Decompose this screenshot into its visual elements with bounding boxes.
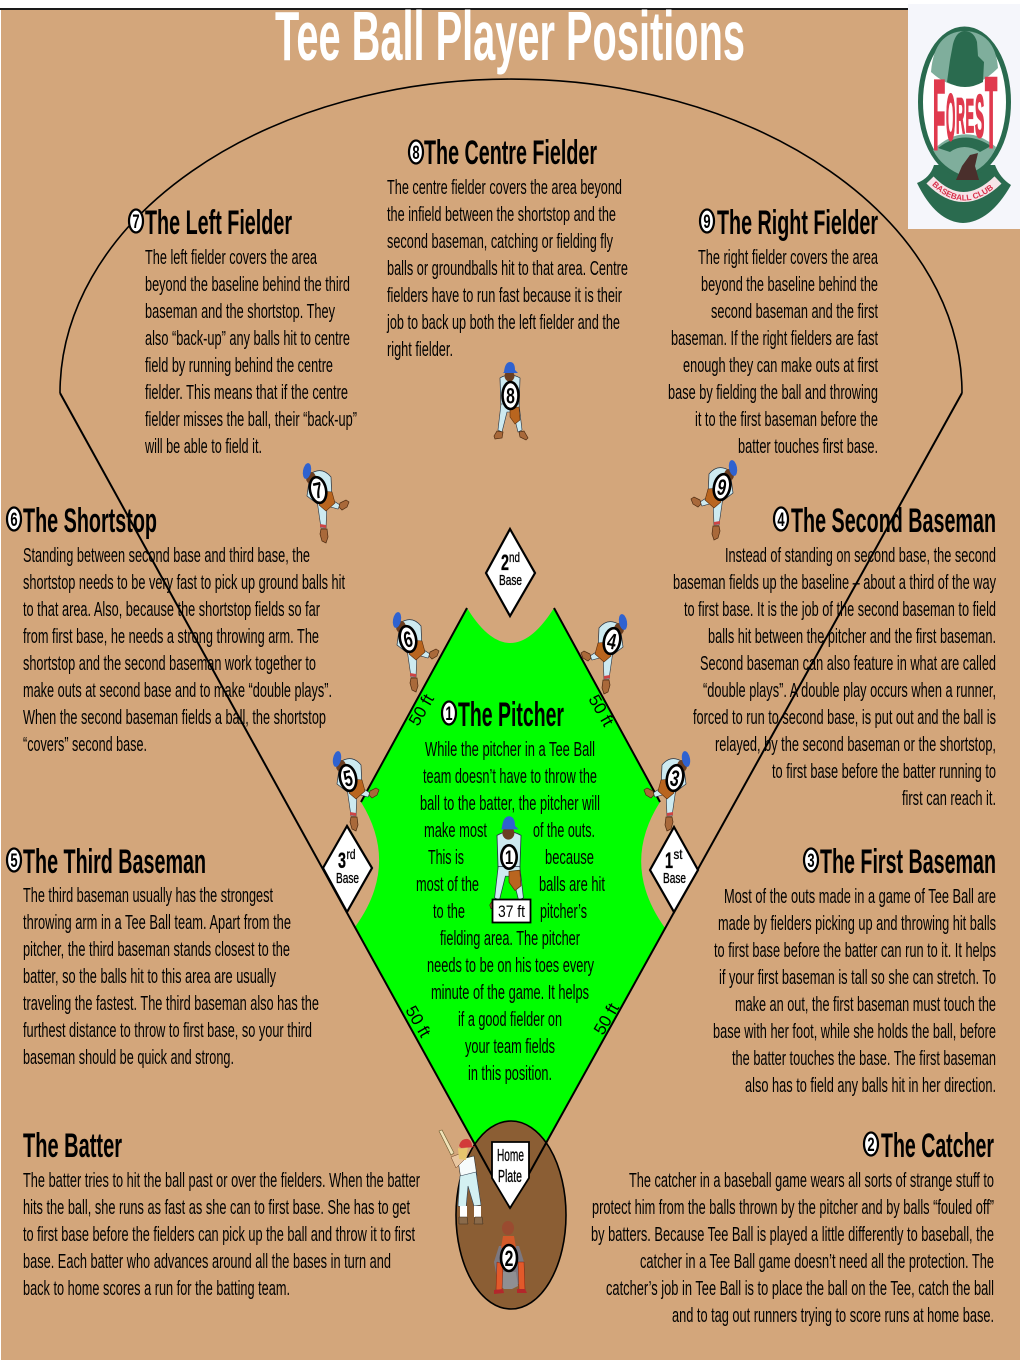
- second base: nd: [509, 549, 520, 565]
- text: pitcher description: fielding area. The pitcher: [440, 927, 580, 950]
- text: left fielder description: field by running behind the centre: [145, 354, 333, 377]
- player: batter: [439, 1130, 483, 1224]
- panel: centre fielder: [386, 134, 628, 361]
- text: left fielder description: also “back-up” any balls hit to centre: [145, 327, 350, 350]
- player 2 catcher: [494, 1221, 527, 1294]
- heading: the third baseman: [7, 843, 206, 881]
- text: second baseman description: [673, 544, 996, 810]
- player 5 third baseman: [332, 750, 379, 831]
- player 6 shortstop: [392, 611, 439, 692]
- player 9 right fielder: [691, 459, 738, 540]
- 50 ft label lower right: 50 ft: [590, 1000, 623, 1038]
- 37 ft distance box: 37 ft: [498, 902, 525, 921]
- heading: the right fielder: 9: [703, 210, 711, 233]
- text: pitcher description: team doesn’t have to throw the: [423, 765, 597, 788]
- text: centre fielder description: right fielder.: [387, 338, 453, 361]
- player 7 left fielder: 7: [311, 478, 325, 504]
- text: right fielder description: enough they can make outs at first: [683, 354, 878, 377]
- text: pitcher description: in this position.: [468, 1062, 552, 1085]
- text: pitcher description: pitcher’s: [540, 900, 587, 923]
- text: shortstop description: to that area. Also, because the shortstop fields so far: [23, 598, 320, 621]
- text: left fielder description: [144, 246, 357, 458]
- player 7 left fielder: [302, 462, 349, 543]
- 50 ft label upper right: 50 ft: [585, 692, 618, 730]
- player 4 second baseman: [581, 613, 628, 694]
- text: centre fielder description: The centre fielder covers the area beyond: [387, 176, 622, 199]
- text: left fielder description: The left fielder covers the area: [145, 246, 317, 269]
- panel: right fielder: [668, 204, 878, 458]
- heading: the pitcher: The Pitcher: [458, 696, 564, 734]
- text: left fielder description: fielder. This means that if the centre: [145, 381, 348, 404]
- text: right fielder description: The right fielder covers the area: [698, 246, 878, 269]
- home plate: Home: [497, 1145, 524, 1165]
- panel: shortstop: [7, 502, 345, 756]
- text: shortstop description: from first base, he needs a strong throwing arm. The: [23, 625, 319, 648]
- third base: rd: [346, 846, 356, 862]
- text: third baseman description: baseman should be quick and strong.: [23, 1046, 234, 1069]
- first base: st: [674, 846, 683, 862]
- player 4 second baseman: 4: [605, 629, 619, 655]
- panel: the batter: [23, 1127, 420, 1300]
- heading: the third baseman: 5: [10, 849, 18, 872]
- text: pitcher description: [416, 738, 605, 1085]
- text: pitcher description: make most: [424, 819, 487, 842]
- player 1 pitcher: [490, 816, 531, 910]
- player 5 third baseman: 5: [341, 766, 355, 792]
- second base: [486, 529, 535, 616]
- panel: the catcher: [591, 1127, 994, 1327]
- text: batter description: hits the ball, she runs as fast as she can to first base. She has to get: [23, 1196, 410, 1219]
- panel: the pitcher: [416, 696, 605, 1085]
- text: centre fielder description: [386, 176, 628, 361]
- 50 ft label lower left: 50 ft: [402, 1002, 435, 1041]
- text: third baseman description: traveling the fastest. The third baseman also has the: [23, 992, 319, 1015]
- text: batter description: The batter tries to hit the ball past or over the fielders. When the batter: [23, 1169, 420, 1192]
- text: centre fielder description: job to back up both the left fielder and the: [386, 311, 620, 334]
- logo: Forest Baseball Club: F: [933, 60, 945, 170]
- text: catcher description: [591, 1169, 994, 1327]
- text: batter description: to first base before the fielders can pick up the ball and throw it to first: [23, 1223, 415, 1246]
- player 3 first baseman: 3: [668, 766, 682, 792]
- heading: the shortstop: 6: [10, 508, 18, 531]
- heading: the left fielder: 7: [132, 210, 140, 233]
- text: shortstop description: [23, 544, 345, 756]
- logo: Forest Baseball Club: S: [975, 85, 984, 151]
- heading: the left fielder: The Left Fielder: [145, 204, 292, 242]
- text: pitcher description: of the outs.: [533, 819, 595, 842]
- right foul line: [510, 393, 962, 1208]
- text: pitcher description: ball to the batter, the pitcher will: [420, 792, 600, 815]
- text: centre fielder description: second baseman, catching or fielding fly: [387, 230, 613, 253]
- panel: first baseman: [713, 843, 996, 1097]
- text: right fielder description: second baseman and the first: [711, 300, 878, 323]
- text: right fielder description: baseman. If the right fielders are fast: [671, 327, 878, 350]
- player 6 shortstop: 6: [401, 627, 415, 653]
- text: pitcher description: balls are hit: [539, 873, 605, 896]
- first base: Base: [663, 871, 686, 887]
- second to first base line: [554, 608, 660, 802]
- player 8 centre fielder: 8: [506, 384, 515, 409]
- heading: the pitcher: 1: [445, 702, 453, 725]
- text: pitcher description: This is: [428, 846, 464, 869]
- player 9 right fielder: 9: [715, 475, 729, 501]
- heading: the centre fielder: [409, 134, 597, 172]
- home plate: Plate: [498, 1166, 522, 1186]
- heading: the right fielder: The Right Fielder: [717, 204, 878, 242]
- text: right fielder description: base by fielding the ball and throwing: [668, 381, 878, 404]
- player 1 pitcher: 1: [505, 846, 513, 868]
- logo: Forest Baseball Club: T: [985, 58, 997, 169]
- text: left fielder description: baseman and the shortstop. They: [145, 300, 335, 323]
- text: third baseman description: throwing arm in a Tee Ball team. Apart from the: [23, 911, 291, 934]
- second base: Base: [499, 573, 522, 589]
- text: left fielder description: fielder misses the ball, their “back-up”: [145, 408, 357, 431]
- left foul line: [60, 393, 510, 1208]
- text: batter description: base. Each batter who advances around all the bases in turn and: [23, 1250, 391, 1273]
- text: batter description: [23, 1169, 420, 1300]
- text: pitcher description: most of the: [416, 873, 479, 896]
- text: third baseman description: [23, 884, 319, 1069]
- 50 ft label upper left: 50 ft: [405, 691, 438, 729]
- text: centre fielder description: balls or groundballs hit to that area. Centre: [387, 257, 628, 280]
- player 8 centre fielder: [494, 362, 528, 440]
- heading: the centre fielder: 8: [412, 141, 420, 164]
- heading: the third baseman: The Third Baseman: [23, 843, 206, 881]
- third base: [323, 826, 372, 912]
- text: third baseman description: The third baseman usually has the strongest: [23, 884, 273, 907]
- heading: the pitcher: [442, 696, 564, 734]
- top border line: [0, 8, 908, 10]
- text: first baseman description: [713, 885, 996, 1097]
- player 3 first baseman: [644, 750, 691, 831]
- text: right fielder description: beyond the baseline behind the: [701, 273, 878, 296]
- text: right fielder description: batter touches first base.: [738, 435, 878, 458]
- text: shortstop description: When the second baseman fields a ball, the shortstop: [23, 706, 326, 729]
- text: third baseman description: batter, so the balls hit to this area are usually: [23, 965, 276, 988]
- first base: 1: [665, 848, 673, 873]
- text: pitcher description: needs to be on his toes every: [427, 954, 594, 977]
- heading: the first baseman: 3: [807, 849, 815, 872]
- third base: 3: [338, 848, 346, 873]
- panel: third baseman: [7, 843, 319, 1069]
- text: right fielder description: [668, 246, 878, 458]
- player 2 catcher: 2: [505, 1246, 514, 1272]
- heading: the shortstop: [7, 502, 157, 540]
- infield grass: [355, 608, 665, 1208]
- home plate: [492, 1142, 529, 1208]
- heading: the centre fielder: The Centre Fielder: [424, 134, 597, 172]
- first base: [650, 827, 698, 912]
- logo: Forest Baseball Club: BASEBALL CLUB: [932, 181, 993, 200]
- text: pitcher description: your team fields: [465, 1035, 555, 1058]
- text: pitcher description: minute of the game. It helps: [431, 981, 589, 1004]
- logo: Forest Baseball Club: O: [946, 82, 955, 155]
- text: third baseman description: pitcher, the third baseman stands closest to the: [23, 938, 290, 961]
- second base: 2: [501, 550, 509, 575]
- text: third baseman description: furthest distance to throw to first base, so your third: [23, 1019, 312, 1042]
- panel: second baseman: [673, 502, 996, 810]
- text: left fielder description: beyond the baseline behind the third: [145, 273, 350, 296]
- text: right fielder description: it to the first baseman before the: [695, 408, 878, 431]
- heading: the second baseman: 4: [777, 508, 785, 531]
- home plate dirt circle: [456, 1121, 566, 1309]
- text: pitcher description: While the pitcher in a Tee Ball: [425, 738, 595, 761]
- heading: the batter: The Batter: [23, 1127, 122, 1165]
- text: batter description: back to home scores a run for the batting team.: [23, 1277, 290, 1300]
- text: shortstop description: Standing between second base and third base, the: [23, 544, 310, 567]
- text: centre fielder description: the infield between the shortstop and the: [387, 203, 616, 226]
- text: shortstop description: shortstop needs to be very fast to pick up ground balls hit: [23, 571, 345, 594]
- 37 ft distance box: [492, 900, 530, 922]
- heading: the right fielder: [700, 204, 878, 242]
- heading: the catcher: 2: [867, 1133, 875, 1156]
- third base: Base: [336, 871, 359, 887]
- text: centre fielder description: fielders have to run fast because it is their: [387, 284, 622, 307]
- text: pitcher description: if a good fielder on: [458, 1008, 562, 1031]
- text: shortstop description: “covers” second base.: [23, 733, 147, 756]
- text: shortstop description: shortstop and the second baseman work together to: [23, 652, 316, 675]
- text: left fielder description: will be able to field it.: [144, 435, 262, 458]
- logo: Forest Baseball Club: [908, 4, 1020, 229]
- logo: Forest Baseball Club: R: [956, 88, 965, 144]
- logo: Forest Baseball Club: E: [966, 91, 974, 143]
- heading: the left fielder: [129, 204, 292, 242]
- second to third base line: [361, 608, 467, 802]
- heading: the shortstop: The Shortstop: [23, 502, 157, 540]
- outfield arc: [60, 79, 962, 393]
- text: pitcher description: because: [545, 846, 594, 869]
- text: pitcher description: to the: [433, 900, 465, 923]
- text: shortstop description: make outs at second base and to make “double plays”.: [23, 679, 332, 702]
- panel: left fielder: [129, 204, 357, 458]
